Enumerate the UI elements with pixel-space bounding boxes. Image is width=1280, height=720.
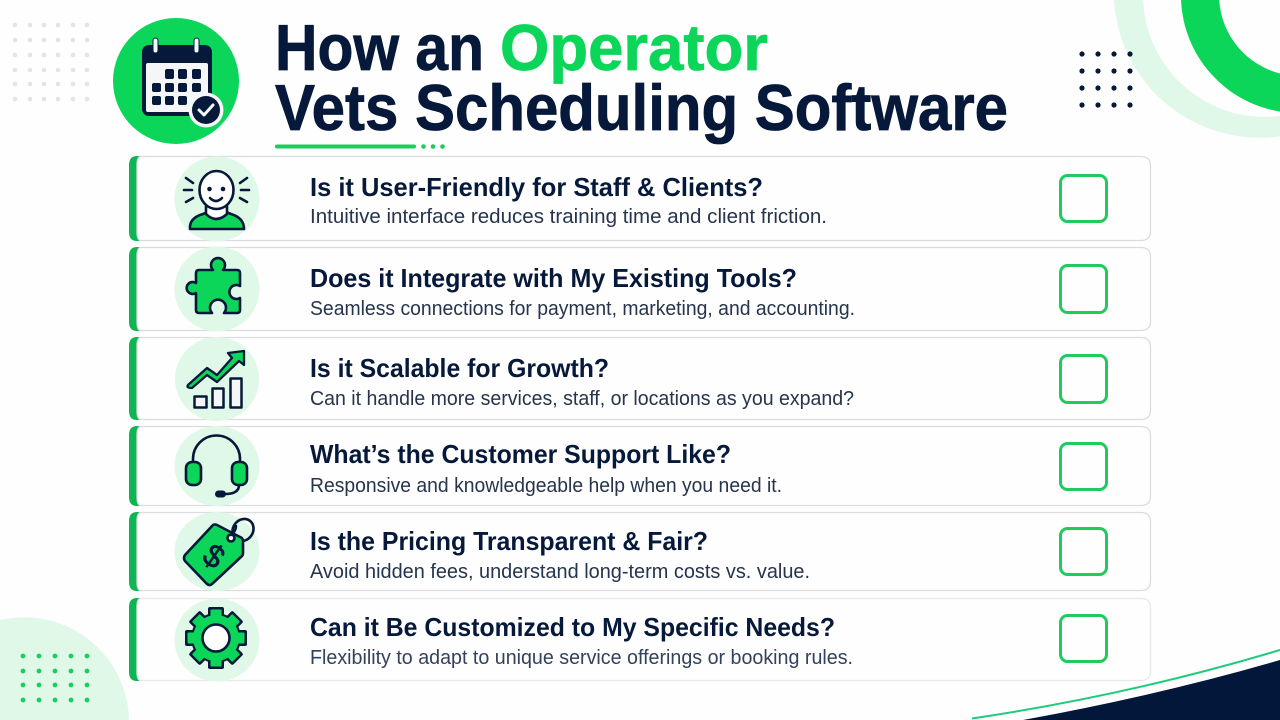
decoration: top-right arcs (1114, 0, 1280, 138)
icon: smiling person (174, 156, 260, 242)
icon: gear (174, 598, 260, 682)
panel: scalability: Is it Scalable for Growth? (310, 353, 609, 383)
icon: price tag (174, 512, 260, 591)
checkbox (1060, 528, 1106, 574)
checkbox (1060, 266, 1106, 312)
panel: user-friendly (129, 156, 1150, 242)
panel: user-friendly: Intuitive interface reduces training time and client friction. (310, 206, 827, 228)
panel: user-friendly: Is it User-Friendly for Staff & Clients? (310, 172, 763, 202)
icon: price tag: $ (196, 536, 232, 576)
panel: scalability: Can it handle more services, staff, or locations as you expand? (310, 388, 854, 410)
icon: puzzle piece (174, 246, 260, 332)
panel: integrations: Does it Integrate with My Existing Tools? (310, 263, 797, 293)
decoration: bottom-left circle with dots (0, 617, 129, 720)
panel: customer support (129, 426, 1150, 506)
panel: customization (129, 598, 1150, 682)
panel: pricing: Is the Pricing Transparent & Fair? (310, 526, 708, 556)
checkbox (1060, 616, 1106, 662)
checkbox (1060, 444, 1106, 490)
decoration: top-left dot grid (13, 23, 89, 101)
title underline (275, 144, 445, 149)
title: How an (275, 11, 484, 84)
panel: integrations: Seamless connections for payment, marketing, and accounting. (310, 298, 855, 320)
icon: calendar with check badge (113, 18, 239, 144)
checkbox (1060, 176, 1106, 222)
panel: scalability (129, 337, 1150, 421)
panel: pricing: Avoid hidden fees, understand long-term costs vs. value. (310, 561, 810, 583)
title (275, 11, 1008, 144)
panel: customization: Can it Be Customized to My Specific Needs? (310, 612, 835, 642)
panel: customer support: What’s the Customer Support Like? (310, 439, 731, 469)
panel: integrations (129, 246, 1150, 332)
panel: customization: Flexibility to adapt to unique service offerings or booking rules. (310, 647, 853, 669)
icon: growth chart (175, 337, 259, 421)
title: Operator (500, 11, 768, 84)
decoration: bottom-right navy swoosh (972, 650, 1280, 720)
decoration: top-right navy dot grid (1079, 51, 1133, 108)
checkbox (1060, 356, 1106, 402)
panel: customer support: Responsive and knowledgeable help when you need it. (310, 475, 782, 497)
icon: headset (174, 426, 260, 506)
title: Vets Scheduling Software (275, 71, 1008, 144)
panel: pricing (129, 512, 1150, 591)
